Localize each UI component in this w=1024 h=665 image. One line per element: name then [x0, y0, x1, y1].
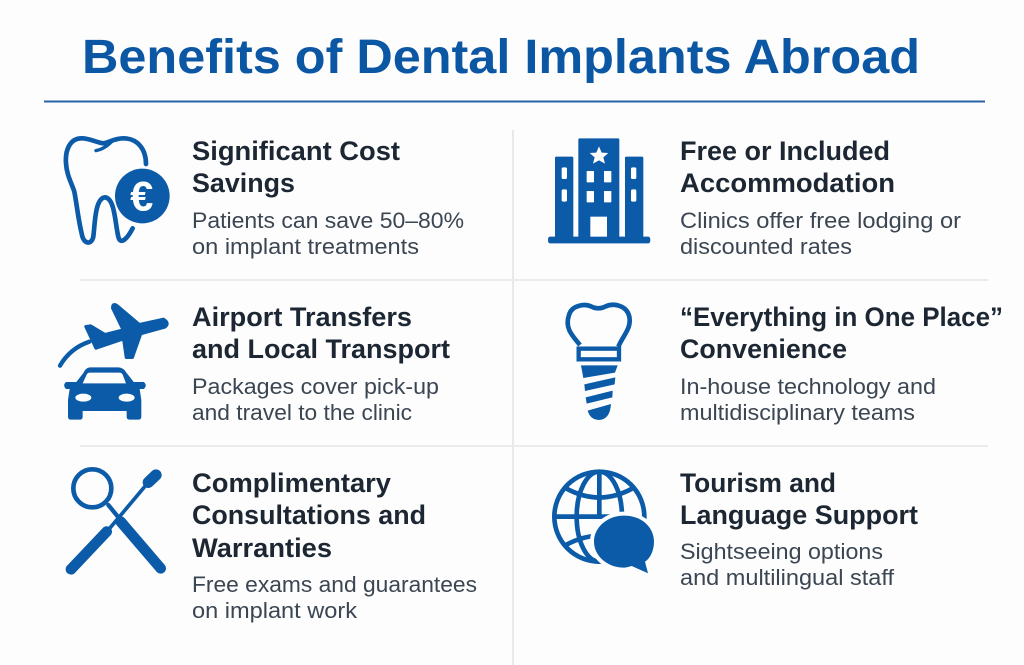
heading: accommodation: Accommodation [680, 168, 895, 198]
heading: consultations: Complimentary [192, 468, 391, 498]
heading: accommodation [680, 136, 895, 198]
panel: tourism and language [554, 468, 918, 590]
heading: convenience [680, 302, 1003, 364]
heading: accommodation: Free or Included [680, 136, 890, 166]
text: cost savings: Patients can save 50–80% [192, 208, 464, 233]
icon: tooth with euro coin [66, 138, 170, 243]
text: consultations [192, 572, 477, 623]
text: convenience: multidisciplinary teams [680, 400, 915, 425]
heading: consultations [192, 468, 426, 563]
text: accommodation [680, 208, 961, 259]
heading: cost savings [192, 136, 400, 198]
icon: dental mirror and probe [71, 469, 161, 569]
heading: transport: and Local Transport [192, 334, 450, 364]
text: transport: and travel to the clinic [192, 400, 412, 425]
text: convenience [680, 374, 936, 425]
panel: convenience [568, 302, 1003, 425]
heading: cost savings: Significant Cost [192, 136, 400, 166]
heading: convenience: Convenience [680, 334, 847, 364]
heading: tourism and language [680, 468, 918, 530]
text: transport [192, 374, 439, 425]
text: consultations: Free exams and guarantees [192, 572, 477, 597]
text: cost savings [192, 208, 464, 259]
panel: transport [60, 302, 450, 425]
heading: transport [192, 302, 450, 364]
text: cost savings: on implant treatments [192, 234, 419, 259]
text: tourism and language: and multilingual staff [680, 565, 895, 590]
heading: cost savings: Savings [192, 168, 295, 198]
icon: dental implant [568, 305, 630, 420]
heading: transport: Airport Transfers [192, 302, 412, 332]
text: accommodation: Clinics offer free lodging or [680, 208, 961, 233]
text: tourism and language: Sightseeing options [680, 539, 883, 564]
heading: consultations: Warranties [192, 533, 332, 563]
panel: consultations [71, 468, 477, 623]
text: accommodation: discounted rates [680, 234, 852, 259]
icon: plane and car [60, 305, 167, 420]
heading: convenience: “Everything in One Place” [680, 302, 1003, 332]
icon: hotel [548, 138, 650, 243]
heading: consultations: Consultations and [192, 500, 426, 530]
heading: tourism and language: Language Support [680, 500, 918, 530]
text: convenience: In-house technology and [680, 374, 936, 399]
text: consultations: on implant work [192, 598, 358, 623]
panel: cost savings [66, 136, 464, 259]
icon: globe with speech bubble [554, 472, 658, 573]
panel: accommodation [548, 136, 961, 259]
text: tourism and language [680, 539, 895, 590]
heading: tourism and language: Tourism and [680, 468, 836, 498]
title: Benefits of Dental Implants Abroad [82, 31, 920, 84]
text: transport: Packages cover pick-up [192, 374, 439, 399]
icon: tooth with euro coin: € [130, 173, 153, 220]
